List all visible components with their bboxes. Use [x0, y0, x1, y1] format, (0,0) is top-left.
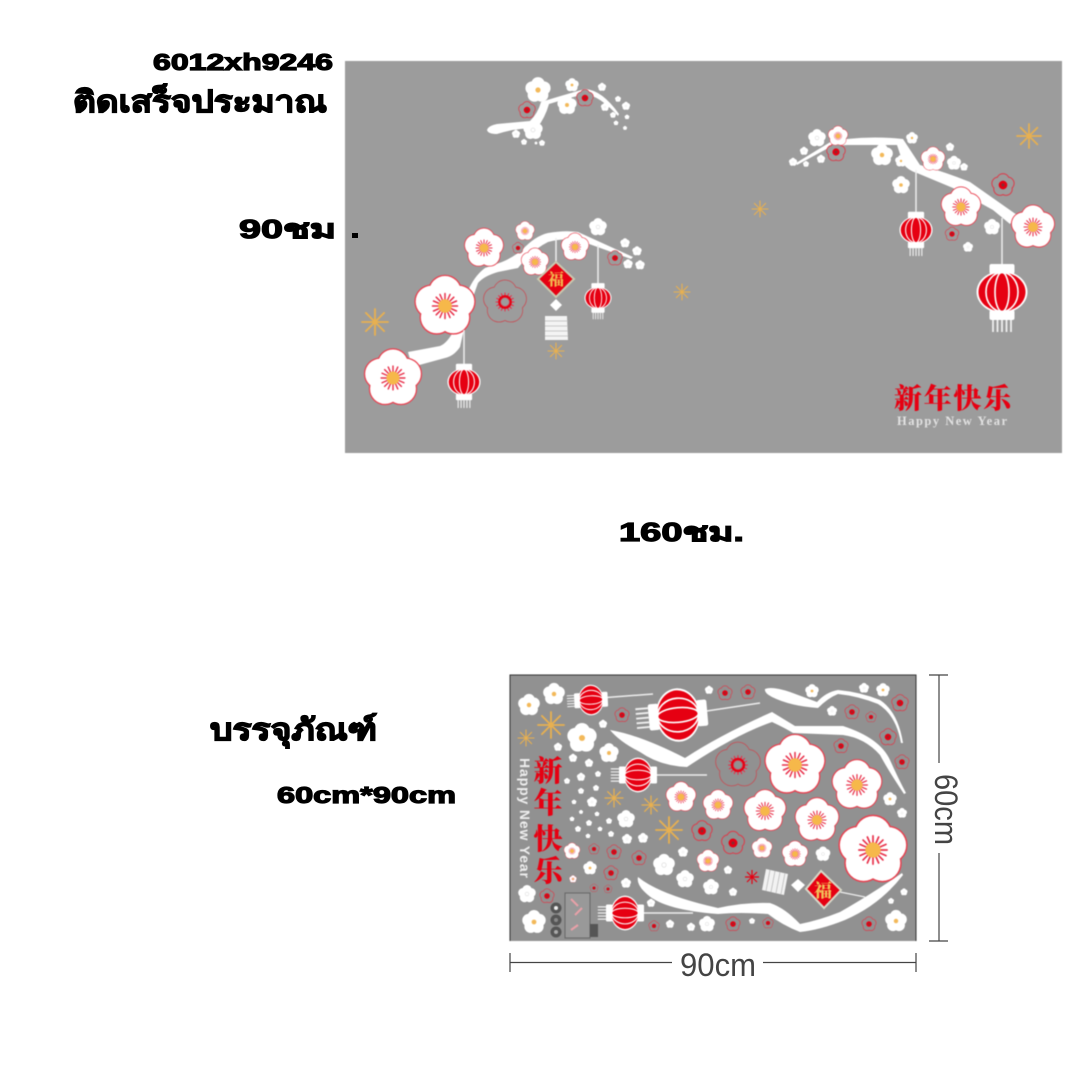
sheet vertical greeting: Happy New Year [517, 758, 533, 879]
branch: top centre [487, 77, 630, 146]
dimension: height 60cm: 60cm [928, 774, 964, 845]
dimension: height 60cm [928, 675, 964, 941]
width label: 160ชม. [619, 517, 744, 547]
panel: finished wall decoration [345, 61, 1062, 453]
sheet vertical greeting: 乐 [533, 849, 565, 890]
hanging fortune charm and firecracker [538, 238, 574, 359]
branch: lower left with blossoms [365, 218, 645, 404]
heading: approximate finished size: ติดเสร็จประมาณ [73, 83, 327, 119]
sheet vertical greeting: 快 [533, 817, 563, 858]
lantern: right large [976, 218, 1028, 332]
hanging fortune charm and firecracker: 福 [548, 267, 564, 290]
dimension: width 90cm [510, 947, 916, 983]
sheet fortune charm and firecracker [745, 869, 865, 908]
sheet white blossoms [518, 683, 908, 933]
lantern: centre [584, 245, 612, 319]
sheet vertical greeting [517, 749, 565, 890]
lantern: lower left [447, 330, 481, 408]
greeting text: 新年快乐 [894, 377, 1014, 417]
lantern: right small [899, 170, 933, 256]
package size label: 60cm*90cm [277, 782, 456, 808]
sheet vertical greeting: 年 [533, 781, 563, 822]
panel: sticker sheet [510, 675, 916, 941]
dimension: width 90cm: 90cm [680, 947, 756, 983]
sheet instruction label and barcode [550, 893, 598, 938]
heading: package: บรรจุภัณฑ์ [210, 713, 377, 749]
sheet lanterns [566, 684, 760, 930]
greeting text: Happy New Year [897, 414, 1007, 428]
sheet fortune charm and firecracker: 福 [814, 877, 832, 903]
height label: 90ชม [239, 214, 336, 244]
sheet stars [518, 712, 682, 843]
sheet red-outline small blossoms [540, 685, 909, 931]
sheet vertical greeting: 新 [533, 749, 563, 790]
sheet large blossoms [564, 735, 906, 882]
branch: upper right with blossoms [789, 126, 1054, 252]
height label dot [352, 233, 358, 238]
sparkle stars [362, 124, 1041, 335]
size code label: 6012xh9246 [153, 49, 333, 75]
sheet branches [610, 688, 906, 932]
